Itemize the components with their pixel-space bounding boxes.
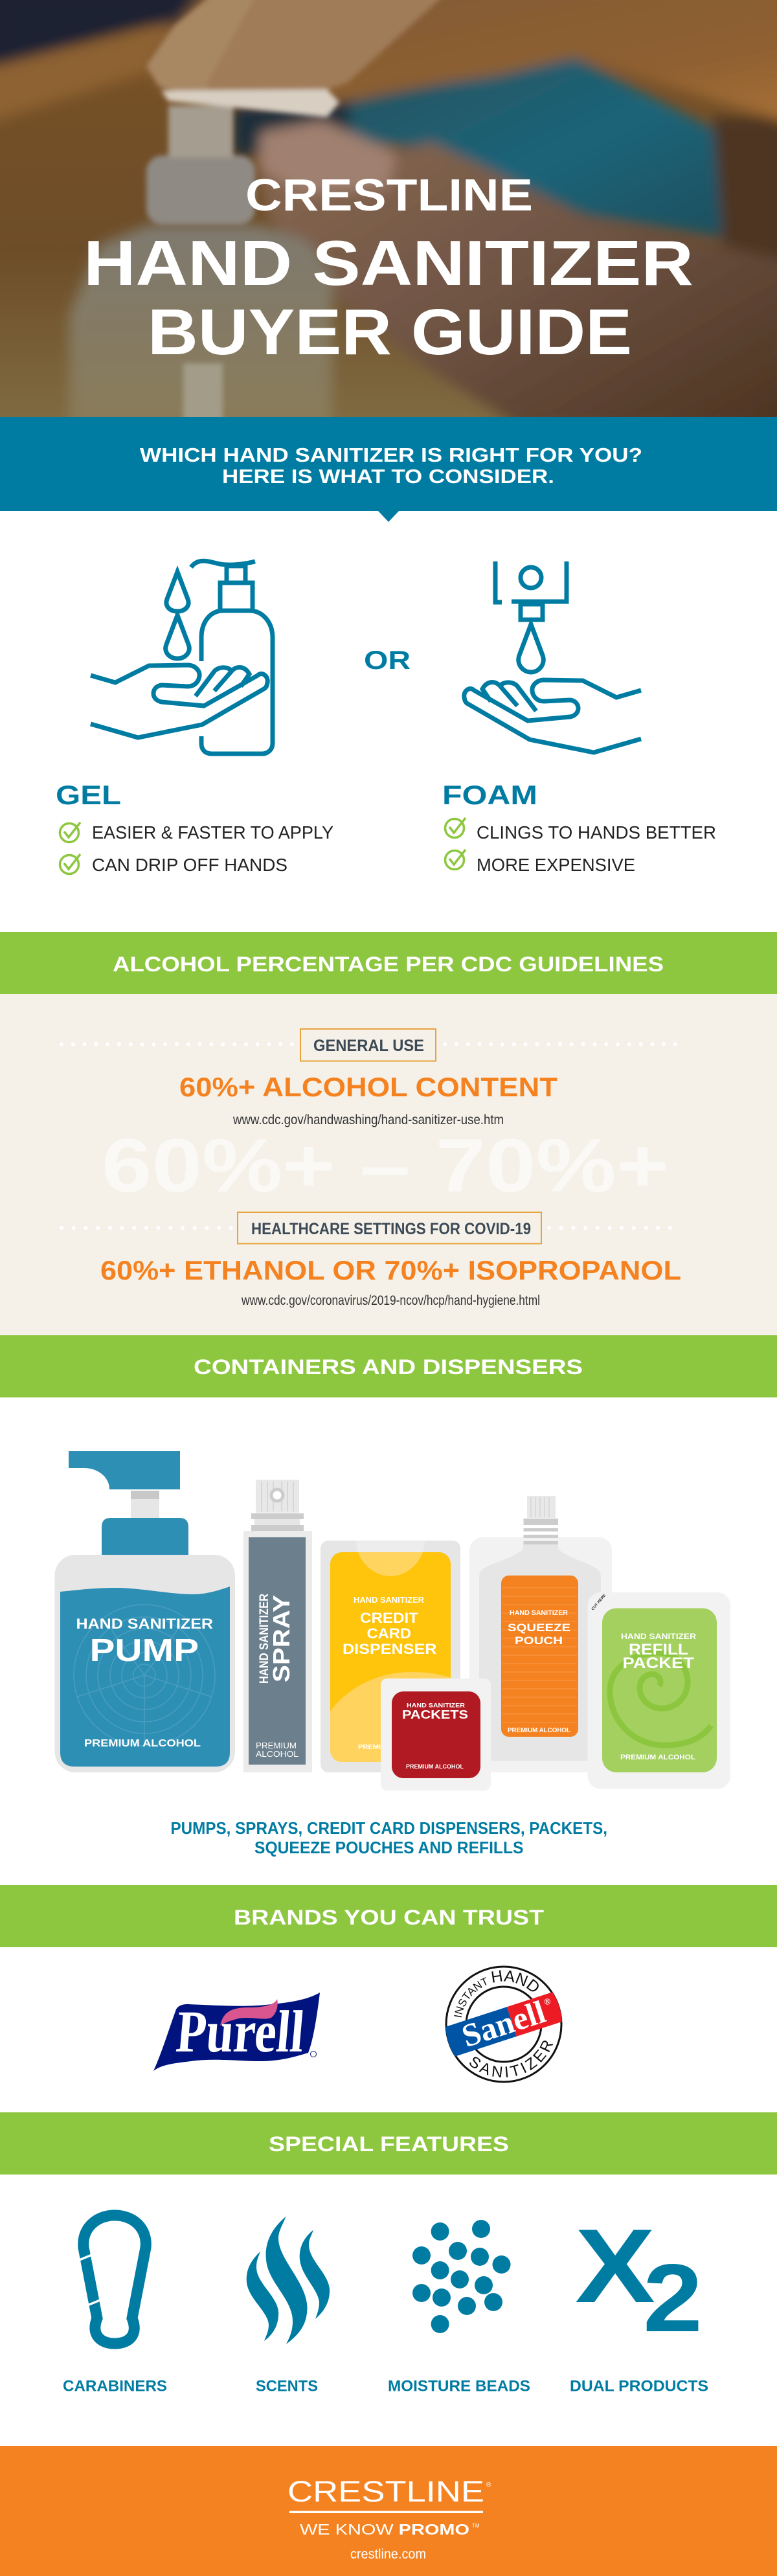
- logo: sanell: Sanell: [457, 1993, 550, 2054]
- product: refill packet: CUT HERE: [591, 1594, 607, 1611]
- product: credit card dispenser: HAND SANITIZER: [354, 1595, 425, 1605]
- product: squeeze pouch: SQUEEZE: [508, 1621, 570, 1634]
- title: CRESTLINE: [245, 170, 533, 220]
- gel benefit list: [60, 822, 333, 875]
- heading band: containers: [0, 1335, 777, 1397]
- feature labels: DUAL PRODUCTS: [570, 2378, 708, 2395]
- foam benefit list: MORE EXPENSIVE: [477, 855, 635, 875]
- product: spray: PREMIUM: [256, 1741, 297, 1750]
- intro band with question: HERE IS WHAT TO CONSIDER.: [222, 465, 554, 488]
- product: credit card dispenser: CREDIT: [360, 1610, 419, 1626]
- footer logo: WE KNOW PROMO: [300, 2521, 469, 2538]
- foam benefit list: [445, 818, 716, 875]
- containers caption: SQUEEZE POUCHES AND REFILLS: [254, 1838, 523, 1857]
- general use source url: www.cdc.gov/handwashing/hand-sanitizer-use.htm: [232, 1113, 504, 1127]
- gel benefit list: CAN DRIP OFF HANDS: [92, 855, 287, 875]
- heading band: brands: BRANDS YOU CAN TRUST: [234, 1906, 545, 1929]
- logo: sanell: INSTANT HAND: [454, 1970, 539, 2018]
- upper fingers: [146, 0, 258, 101]
- product: refill packet: PACKET: [623, 1655, 694, 1672]
- containers caption: PUMPS, SPRAYS, CREDIT CARD DISPENSERS, PACKETS,: [171, 1818, 607, 1838]
- product: pump bottle: PUMP: [89, 1633, 199, 1668]
- heading band: containers: CONTAINERS AND DISPENSERS: [194, 1355, 583, 1379]
- product: squeeze pouch: HAND SANITIZER: [510, 1609, 568, 1617]
- product: credit card dispenser: DISPENSER: [343, 1641, 437, 1657]
- feature labels: CARABINERS: [63, 2378, 167, 2395]
- product: packets: PACKETS: [402, 1708, 468, 1721]
- feature labels: SCENTS: [256, 2378, 318, 2395]
- footer website: crestline.com: [350, 2547, 426, 2562]
- label: healthcare settings: [238, 1212, 541, 1243]
- product: pump bottle: PREMIUM ALCOHOL: [84, 1738, 201, 1749]
- title: BUYER GUIDE: [148, 296, 632, 368]
- product: squeeze pouch: PREMIUM ALCOHOL: [508, 1727, 570, 1734]
- logo: purell: [153, 1993, 320, 2071]
- heading band: alcohol percentage: ALCOHOL PERCENTAGE PER CDC GUIDELINES: [113, 953, 664, 976]
- containers caption: [171, 1818, 607, 1857]
- icon: carabiner: [78, 2215, 146, 2344]
- icon: x2 dual products: 2: [643, 2244, 703, 2352]
- product: packets: [381, 1678, 491, 1791]
- panel: gel versus foam: [56, 561, 716, 875]
- product: squeeze pouch: [469, 1496, 612, 1772]
- logo: sanell: ®: [543, 1996, 552, 2007]
- watermark range: 60%+ – 70%+: [102, 1123, 669, 1208]
- heading band: alcohol percentage: [0, 932, 777, 994]
- product: spray: HAND SANITIZER: [258, 1594, 271, 1684]
- footer logo: ®: [486, 2481, 491, 2489]
- intro band with question: WHICH HAND SANITIZER IS RIGHT FOR YOU?: [140, 444, 642, 466]
- icon: gel bottle and hand: [91, 561, 273, 754]
- title: HAND SANITIZER: [84, 227, 693, 299]
- heading band: special features: [0, 2112, 777, 2175]
- or label: OR: [364, 646, 411, 675]
- footer logo: CRESTLINE: [287, 2475, 484, 2508]
- product: spray: ALCOHOL: [256, 1749, 298, 1759]
- product: packets: PREMIUM ALCOHOL: [406, 1763, 464, 1770]
- feature labels: [63, 2378, 708, 2395]
- hero photo: hands using pump bottle: [0, 0, 777, 427]
- title: [84, 170, 693, 368]
- icon: scent waves: [247, 2217, 330, 2344]
- product: squeeze pouch: POUCH: [515, 1634, 563, 1647]
- heading band: special features: SPECIAL FEATURES: [269, 2132, 509, 2156]
- footer: [0, 2446, 777, 2576]
- icon: x2 dual products: X: [575, 2208, 655, 2325]
- footer logo: TM: [472, 2523, 480, 2529]
- product: refill packet: REFILL: [629, 1641, 688, 1658]
- intro band with question: [0, 417, 777, 522]
- product: refill packet: PREMIUM ALCOHOL: [620, 1754, 695, 1761]
- icon: x2 dual products: [575, 2208, 703, 2352]
- product: pump bottle: HAND SANITIZER: [76, 1616, 213, 1632]
- gel benefit list: EASIER & FASTER TO APPLY: [92, 822, 333, 842]
- panel: containers illustration: [54, 1451, 730, 1857]
- label: general use: [300, 1029, 436, 1061]
- footer logo: [287, 2475, 491, 2538]
- feature labels: MOISTURE BEADS: [388, 2378, 530, 2395]
- product: spray: [243, 1480, 312, 1772]
- icon: moisture beads: [412, 2220, 510, 2333]
- product: pump bottle: [54, 1451, 235, 1772]
- logo: sanell: SANITIZER: [469, 2040, 553, 2077]
- label: healthcare settings: HEALTHCARE SETTINGS FOR COVID-19: [251, 1220, 531, 1238]
- panel: alcohol guidelines: [0, 994, 777, 1335]
- product: spray: SPRAY: [268, 1595, 295, 1682]
- panel: special features: [63, 2208, 708, 2395]
- healthcare source url: www.cdc.gov/coronavirus/2019-ncov/hcp/hand-hygiene.html: [241, 1293, 540, 1308]
- label: general use: GENERAL USE: [313, 1037, 424, 1055]
- general use figure: 60%+ ALCOHOL CONTENT: [179, 1072, 557, 1102]
- product: refill packet: HAND SANITIZER: [621, 1632, 696, 1641]
- gel heading: GEL: [56, 780, 121, 810]
- product: credit card dispenser: PREMI: [358, 1744, 381, 1751]
- foam benefit list: CLINGS TO HANDS BETTER: [477, 822, 716, 842]
- icon: foam dispenser and hand: [464, 561, 641, 752]
- logo: purell: Purell: [174, 1998, 307, 2064]
- product: credit card dispenser: CARD: [366, 1625, 411, 1642]
- foam heading: FOAM: [442, 780, 537, 810]
- logo: sanell: [445, 1966, 562, 2083]
- product: credit card dispenser: [321, 1541, 460, 1772]
- heading band: brands: [0, 1885, 777, 1947]
- product: packets: HAND SANITIZER: [407, 1702, 465, 1710]
- healthcare figure: 60%+ ETHANOL OR 70%+ ISOPROPANOL: [100, 1255, 681, 1285]
- product: refill packet: [588, 1592, 730, 1789]
